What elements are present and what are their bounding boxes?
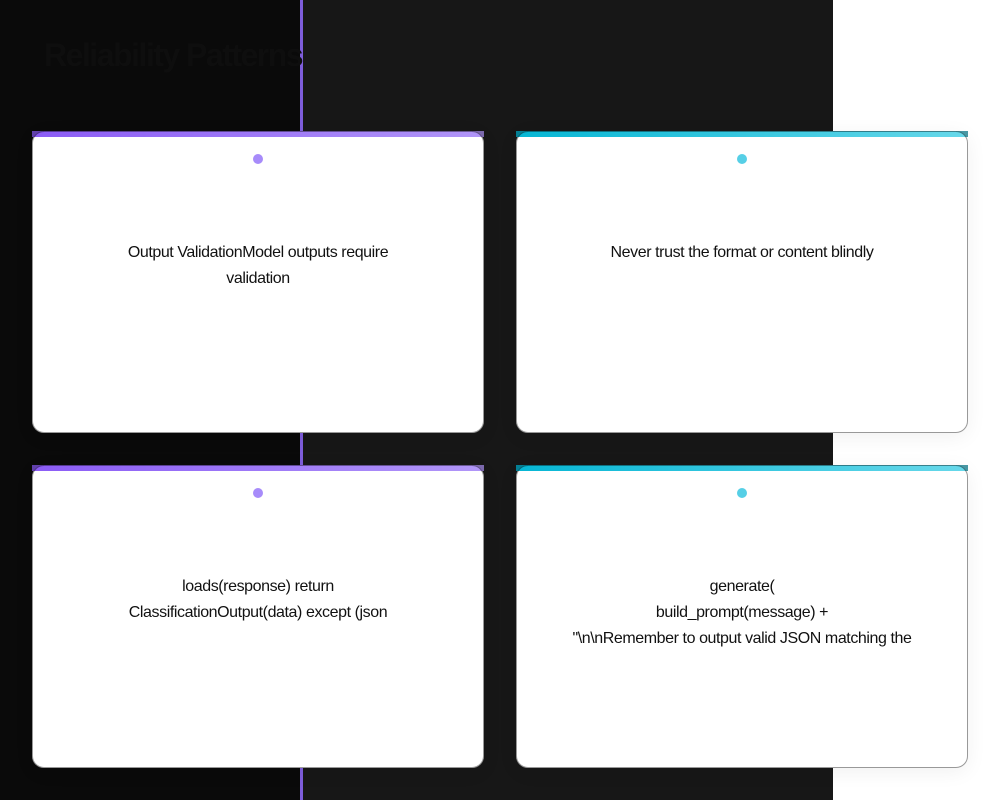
panel: never trust (516, 131, 968, 433)
accent bar (32, 465, 484, 471)
icon: dot (737, 154, 747, 164)
text block: generate( (710, 578, 774, 595)
panel: generate (516, 465, 968, 768)
icon: dot (253, 488, 263, 498)
text block: validation (226, 270, 290, 287)
accent bar (516, 465, 968, 471)
text block (129, 578, 387, 621)
panel: loads response (32, 465, 484, 768)
text block: ClassificationOutput(data) except (json (129, 604, 387, 621)
icon: dot (737, 488, 747, 498)
title: Reliability Patterns (44, 37, 302, 73)
text block: loads(response) return (182, 578, 334, 595)
background: black left panel (0, 0, 300, 800)
accent bar (32, 131, 484, 137)
background: dark main panel (303, 0, 833, 800)
text block: Never trust the format or content blindly (611, 244, 873, 261)
vertical purple line (300, 0, 303, 800)
text block: Output ValidationModel outputs require (128, 244, 388, 261)
icon: dot (253, 154, 263, 164)
text block (128, 244, 388, 287)
text block: build_prompt(message) + (656, 604, 828, 621)
panel: output validation (32, 131, 484, 433)
text block: "\n\nRemember to output valid JSON matching the (572, 630, 912, 647)
text block (572, 578, 912, 647)
accent bar (516, 131, 968, 137)
